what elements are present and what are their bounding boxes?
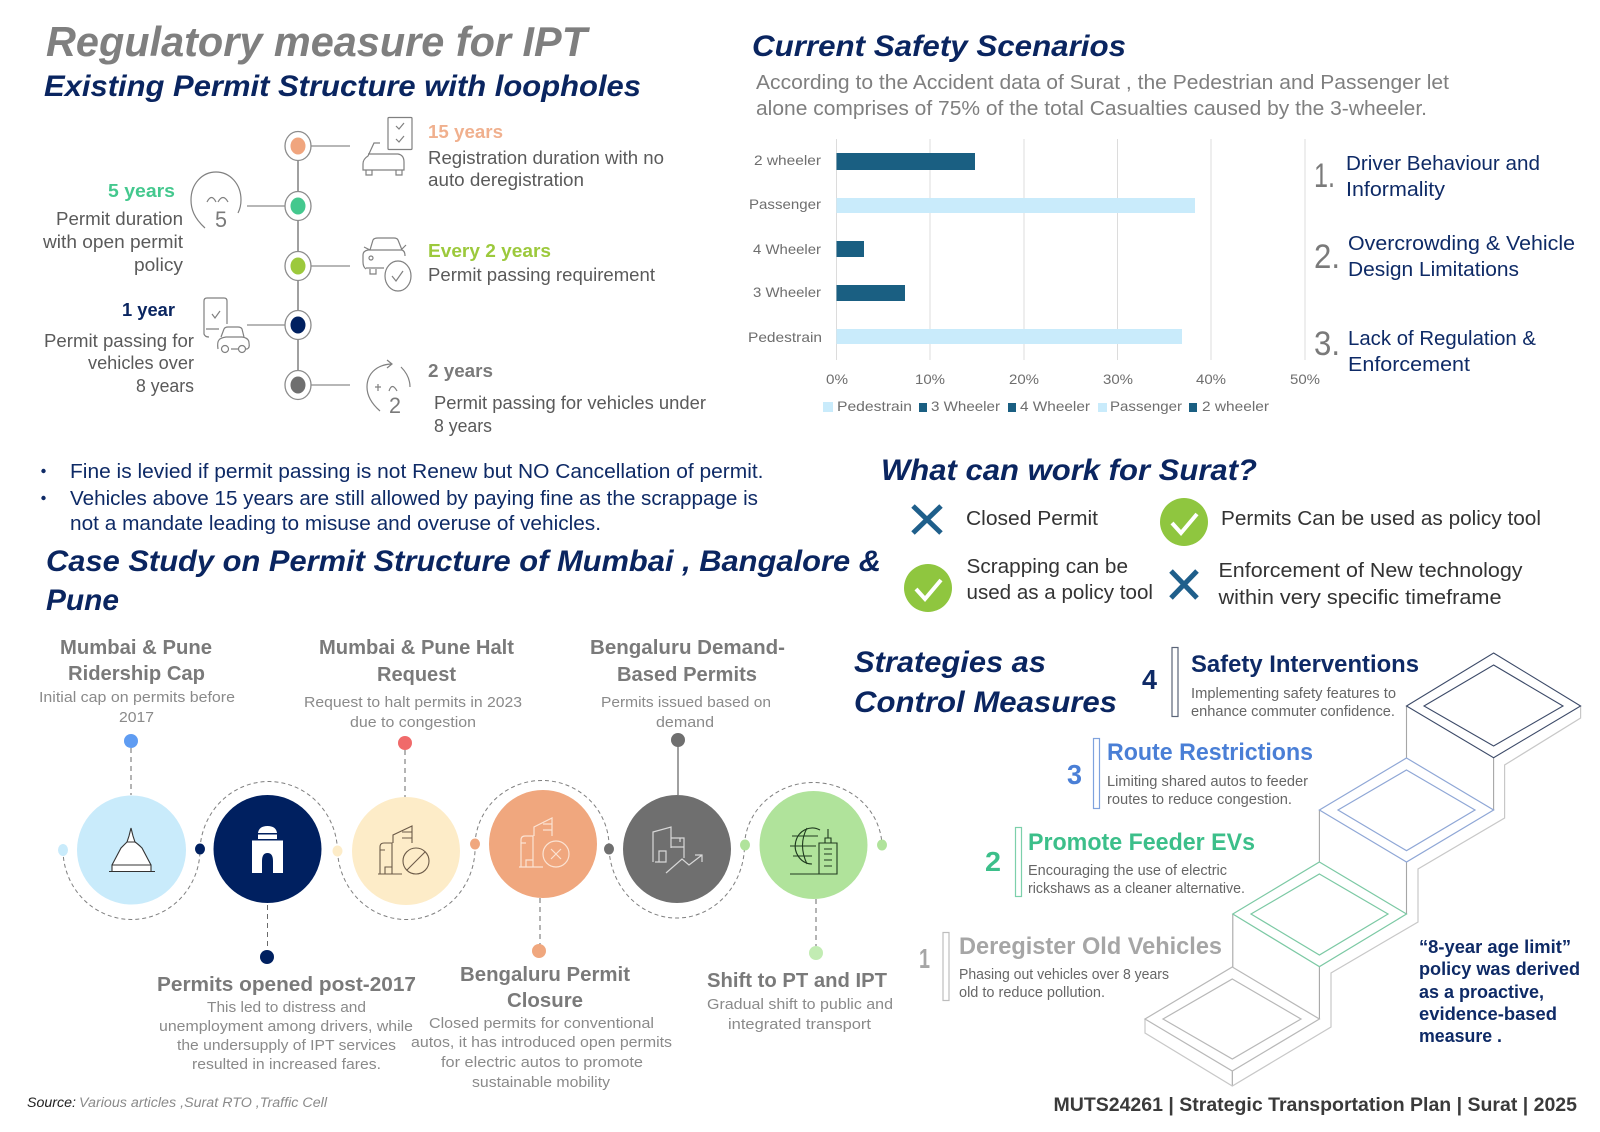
panel: permit timeline bbox=[42, 118, 706, 436]
text: shift to pt and ipt: Gradual shift to public and bbox=[707, 996, 893, 1013]
connector dots bbox=[58, 838, 887, 856]
step 4: safety interventions: enhance commuter confidence. bbox=[1191, 703, 1395, 720]
bar: pedestrain bbox=[836, 329, 1182, 344]
icon: car with checklist bbox=[363, 118, 412, 175]
heading: strategies as control measures bbox=[854, 646, 1117, 719]
icon circle: india gate bbox=[214, 795, 322, 903]
text: 1 year: 1 year bbox=[122, 299, 175, 320]
step 3: route restrictions bbox=[1067, 738, 1313, 808]
category labels: 4 Wheeler bbox=[753, 241, 821, 257]
text: permits opened post-2017: Permits opened post-2017 bbox=[157, 974, 416, 996]
item 2: overcrowding: Design Limitations bbox=[1348, 258, 1519, 281]
text: demand-based permits: Permits issued based on bbox=[601, 694, 771, 711]
text: bengaluru permit closure: for electric autos to promote bbox=[441, 1054, 643, 1071]
timeline node: 15 years bbox=[285, 132, 311, 160]
text block: permit loophole bullets: not a mandate leading to misuse and overuse of vehicles. bbox=[70, 512, 601, 535]
text: ridership cap: 2017 bbox=[119, 709, 154, 726]
item 1: driver behaviour: 1. bbox=[1314, 157, 1335, 195]
footer: project reference: MUTS24261 | Strategic Transportation Plan | Surat | 2025 bbox=[1054, 1094, 1577, 1116]
chart legend: 2 wheeler bbox=[1202, 398, 1269, 414]
text: permits opened post-2017: resulted in increased fares. bbox=[192, 1056, 381, 1073]
text: shift to pt and ipt: Shift to PT and IPT bbox=[707, 970, 887, 992]
text: bengaluru permit closure: sustainable mobility bbox=[472, 1074, 611, 1091]
diagram: isometric steps bbox=[1145, 653, 1581, 1086]
heading: current safety scenarios: Current Safety Scenarios bbox=[752, 30, 1126, 63]
callout: 8-year age limit bbox=[1419, 936, 1580, 1046]
text: shift to pt and ipt: integrated transport bbox=[728, 1016, 872, 1033]
text: demand-based permits bbox=[590, 637, 785, 731]
text: demand-based permits: Based Permits bbox=[617, 664, 757, 686]
step 3: route restrictions: Limiting shared autos to feeder bbox=[1107, 773, 1308, 790]
axis labels: 10% bbox=[915, 371, 945, 387]
icon circle: demand growth bbox=[623, 795, 731, 903]
text: ridership cap: Ridership Cap bbox=[68, 663, 205, 685]
axis labels bbox=[826, 371, 1320, 387]
category labels: 2 wheeler bbox=[754, 152, 821, 168]
text: shift to pt and ipt bbox=[707, 970, 893, 1033]
icon: clock with 5: 5 bbox=[215, 207, 227, 232]
category labels: 3 Wheeler bbox=[753, 284, 821, 300]
text: 15 years: 15 years bbox=[428, 121, 503, 142]
heading: what can work for surat: What can work for Surat? bbox=[881, 454, 1257, 487]
callout: 8-year age limit: as a proactive, bbox=[1419, 981, 1544, 1002]
axis labels: 0% bbox=[826, 371, 848, 387]
chart legend: 4 Wheeler bbox=[1020, 398, 1090, 414]
heading: case study: Case Study on Permit Structure of Mumbai , Bangalore & bbox=[46, 545, 881, 578]
text: 2 years bbox=[428, 360, 706, 436]
chart legend: 3 Wheeler bbox=[931, 398, 1000, 414]
step 2: promote feeder evs bbox=[985, 828, 1255, 897]
step 2: promote feeder evs: Promote Feeder EVs bbox=[1028, 829, 1255, 856]
text: permits opened post-2017 bbox=[157, 974, 416, 1073]
text: ridership cap: Initial cap on permits before bbox=[39, 689, 235, 706]
icon circle: stupa bbox=[77, 796, 186, 904]
heading: case study bbox=[46, 545, 881, 617]
text: every 2 years: Every 2 years bbox=[428, 240, 551, 261]
timeline node: 1 year bbox=[285, 310, 311, 340]
text block: permit loophole bullets: Fine is levied if permit passing is not Renew but NO Cancellation of permit. bbox=[70, 460, 764, 483]
timeline node: 5 years bbox=[285, 192, 311, 220]
step 3: route restrictions: Route Restrictions bbox=[1107, 739, 1313, 766]
item 1: driver behaviour: Driver Behaviour and bbox=[1346, 152, 1540, 175]
axis labels: 50% bbox=[1290, 371, 1320, 387]
text: 1 year: Permit passing for bbox=[44, 330, 194, 351]
text: every 2 years bbox=[428, 240, 655, 285]
text: every 2 years: Permit passing requirement bbox=[428, 264, 655, 285]
step 1: deregister old vehicles: Deregister Old Vehicles bbox=[959, 933, 1222, 960]
chart legend: Passenger bbox=[1110, 398, 1182, 414]
text: 2 years: 2 years bbox=[428, 360, 493, 381]
text: scrapping: Scrapping can be bbox=[966, 555, 1128, 578]
text: permits opened post-2017: This led to distress and bbox=[207, 999, 366, 1016]
step 1: deregister old vehicles bbox=[919, 932, 1222, 1001]
text: enforcement: within very specific timeframe bbox=[1217, 586, 1502, 609]
text: 1 year: 8 years bbox=[136, 375, 194, 396]
text: bengaluru permit closure: Closure bbox=[507, 990, 583, 1012]
source note: Various articles ,Surat RTO ,Traffic Cell bbox=[79, 1095, 328, 1110]
icon: clock with 5 bbox=[191, 172, 241, 232]
icon circle: globe and tower bbox=[760, 791, 868, 899]
step 1: deregister old vehicles: 1 bbox=[919, 943, 930, 974]
item 2: overcrowding: Overcrowding & Vehicle bbox=[1348, 232, 1575, 255]
text: halt request: due to congestion bbox=[350, 714, 476, 731]
text: 5 years: Permit duration bbox=[56, 208, 183, 229]
text block: permit loophole bullets bbox=[41, 460, 764, 535]
text: halt request: Mumbai & Pune Halt bbox=[319, 637, 514, 659]
step 3: route restrictions: 3 bbox=[1067, 759, 1082, 790]
item 3: regulation: 3. bbox=[1314, 325, 1340, 363]
category labels: Passenger bbox=[749, 196, 821, 212]
item 2: overcrowding bbox=[1314, 232, 1575, 281]
bar: 3 wheeler bbox=[836, 285, 905, 301]
text: enforcement: Enforcement of New technology bbox=[1218, 559, 1523, 582]
step 4: safety interventions: Safety Interventions bbox=[1191, 651, 1419, 678]
callout: 8-year age limit: measure . bbox=[1419, 1025, 1502, 1046]
text: enforcement bbox=[1217, 559, 1523, 609]
text: 5 years: 5 years bbox=[108, 180, 175, 201]
axis labels: 20% bbox=[1009, 371, 1039, 387]
text: 15 years bbox=[428, 121, 664, 190]
icon: clock with 2 bbox=[367, 360, 410, 418]
heading: strategies as control measures: Strategies as bbox=[854, 646, 1046, 679]
step 1 platform bbox=[1145, 967, 1319, 1071]
category labels: Pedestrain bbox=[748, 329, 822, 345]
text: 15 years: Registration duration with no bbox=[428, 147, 664, 168]
heading: case study: Pune bbox=[46, 584, 119, 617]
item 2: overcrowding: 2. bbox=[1314, 238, 1340, 276]
step 4: safety interventions bbox=[1142, 648, 1419, 720]
step 4 platform bbox=[1406, 653, 1581, 758]
timeline node: every 2 years bbox=[285, 252, 311, 280]
axis labels: 40% bbox=[1196, 371, 1226, 387]
icon: clock with 2: 2 bbox=[389, 393, 401, 418]
icon: car with tick bbox=[363, 238, 411, 291]
icon: cross bbox=[913, 506, 941, 533]
text: ridership cap bbox=[39, 637, 235, 726]
text: bengaluru permit closure: Bengaluru Permit bbox=[460, 964, 630, 986]
icon: tick bbox=[904, 564, 952, 612]
text block: safety summary: According to the Accident data of Surat , the Pedestrian and Passenger let bbox=[756, 71, 1449, 94]
step 4: safety interventions: Implementing safety features to bbox=[1191, 685, 1396, 702]
text: halt request bbox=[304, 637, 522, 731]
text: ridership cap: Mumbai & Pune bbox=[60, 637, 212, 659]
panel: what can work bbox=[904, 498, 1541, 612]
list: safety issues bbox=[1314, 152, 1575, 376]
text block: safety summary bbox=[756, 71, 1449, 120]
text: permits opened post-2017: unemployment among drivers, while bbox=[159, 1018, 413, 1035]
icon circle: halt buildings bbox=[352, 797, 460, 905]
bar: passenger bbox=[836, 198, 1195, 213]
text: 1 year bbox=[44, 299, 194, 396]
text: 5 years: with open permit bbox=[42, 231, 183, 252]
icon: tick bbox=[1160, 498, 1208, 546]
icon: document with car bbox=[204, 298, 249, 352]
heading: strategies as control measures: Control Measures bbox=[854, 686, 1117, 719]
chart legend bbox=[823, 398, 1269, 414]
callout: 8-year age limit: “8-year age limit” bbox=[1419, 936, 1571, 957]
item 1: driver behaviour: Informality bbox=[1346, 178, 1446, 201]
step 2 platform bbox=[1233, 862, 1406, 967]
text block: safety summary: alone comprises of 75% of the total Casualties caused by the 3-wheeler. bbox=[756, 97, 1427, 120]
timeline node: 2 years bbox=[285, 370, 311, 400]
chart legend: Pedestrain bbox=[837, 398, 912, 414]
item 3: regulation: Enforcement bbox=[1348, 353, 1470, 376]
bar: 2 wheeler bbox=[836, 153, 975, 170]
text: scrapping bbox=[966, 555, 1153, 604]
text: permits opened post-2017: the undersupply of IPT services bbox=[177, 1037, 396, 1054]
text: bengaluru permit closure bbox=[411, 964, 672, 1091]
text: bengaluru permit closure: autos, it has introduced open permits bbox=[411, 1034, 672, 1051]
step 1: deregister old vehicles: Phasing out vehicles over 8 years bbox=[959, 966, 1169, 983]
source note: Source: bbox=[27, 1095, 76, 1110]
title: Regulatory measure for IPT: Regulatory measure for IPT bbox=[46, 18, 590, 65]
step 2: promote feeder evs: Encouraging the use of electric bbox=[1028, 862, 1227, 879]
step 3 platform bbox=[1319, 758, 1494, 862]
step 3: route restrictions: routes to reduce congestion. bbox=[1107, 791, 1292, 808]
item 1: driver behaviour bbox=[1314, 152, 1540, 201]
text: 2 years: Permit passing for vehicles under bbox=[434, 392, 706, 413]
text: closed permit: Closed Permit bbox=[966, 507, 1098, 530]
item 3: regulation: Lack of Regulation & bbox=[1348, 327, 1536, 350]
text: 1 year: vehicles over bbox=[88, 352, 194, 373]
text: 5 years bbox=[42, 180, 184, 275]
step 2: promote feeder evs: 2 bbox=[985, 846, 1001, 877]
text: bengaluru permit closure: Closed permits for conventional bbox=[429, 1015, 654, 1032]
step 2: promote feeder evs: rickshaws as a cleaner alternative. bbox=[1028, 880, 1245, 897]
heading: existing permit structure: Existing Permit Structure with loopholes bbox=[44, 70, 641, 103]
bar chart: casualties by vehicle bbox=[748, 139, 1320, 414]
callout: 8-year age limit: policy was derived bbox=[1419, 958, 1580, 979]
icon: cross bbox=[1171, 571, 1197, 598]
callout: 8-year age limit: evidence-based bbox=[1419, 1003, 1557, 1024]
text: 2 years: 8 years bbox=[434, 415, 492, 436]
text: permits policy tool: Permits Can be used as policy tool bbox=[1221, 507, 1541, 530]
text: demand-based permits: Bengaluru Demand- bbox=[590, 637, 785, 659]
text: halt request: Request bbox=[377, 664, 456, 686]
text: demand-based permits: demand bbox=[656, 714, 714, 731]
text: 15 years: auto deregistration bbox=[428, 169, 584, 190]
text: scrapping: used as a policy tool bbox=[966, 581, 1153, 604]
bar: 4 wheeler bbox=[836, 241, 864, 257]
panel: case study timeline bbox=[39, 637, 893, 1091]
milestone dots bbox=[124, 733, 823, 964]
item 3: regulation bbox=[1314, 325, 1536, 376]
text: 5 years: policy bbox=[134, 254, 184, 275]
text block: permit loophole bullets: Vehicles above 15 years are still allowed by paying fine as the scrappage is bbox=[70, 487, 758, 510]
category labels bbox=[748, 152, 822, 345]
icon circle: closed buildings bbox=[489, 790, 597, 898]
axis labels: 30% bbox=[1103, 371, 1133, 387]
text: halt request: Request to halt permits in 2023 bbox=[304, 694, 522, 711]
step 4: safety interventions: 4 bbox=[1142, 664, 1157, 695]
step 1: deregister old vehicles: old to reduce pollution. bbox=[959, 984, 1105, 1001]
